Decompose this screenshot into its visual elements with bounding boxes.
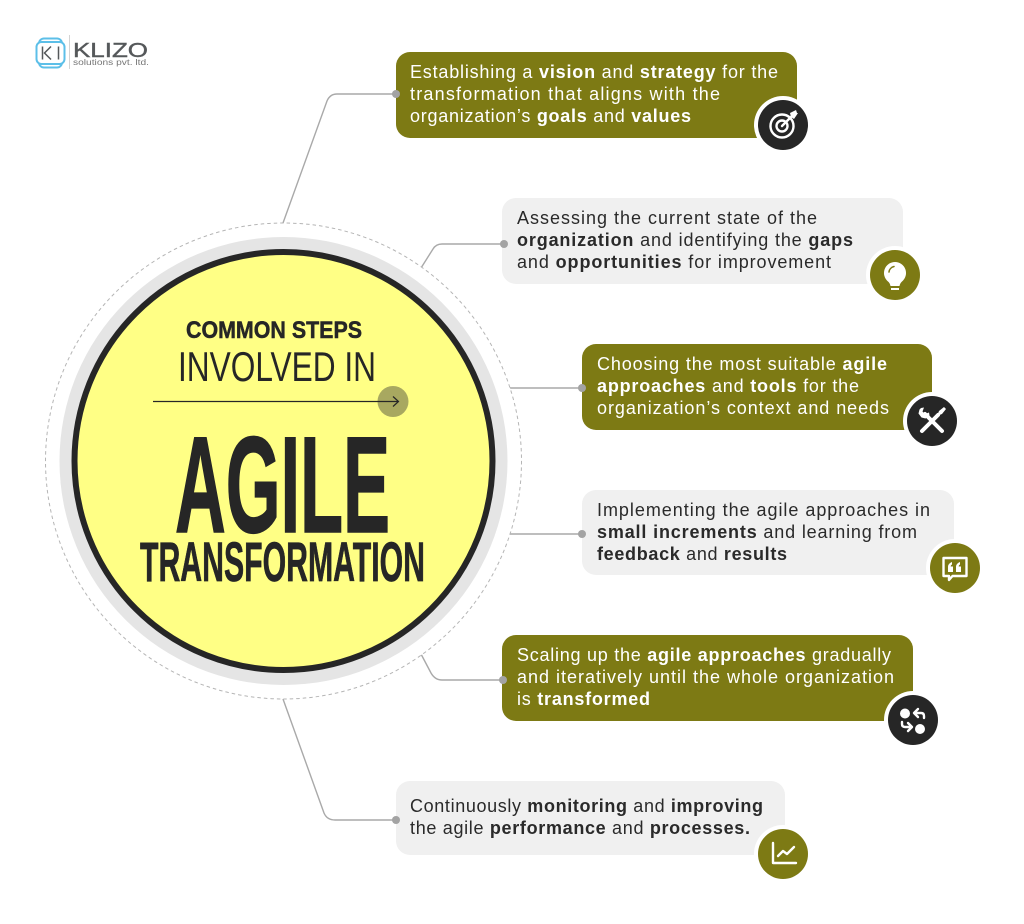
panel: scaling up [499,635,942,749]
text: step 2: and opportunities for improvement [517,252,831,272]
panel: implementing in increments [578,490,984,597]
text: step 6: Continuously monitoring and improving [410,796,763,816]
text: step 1: organization’s goals and values [410,106,691,126]
central circle [46,223,522,699]
text: step 1 [410,62,778,126]
text: step 4: feedback and results [597,544,787,564]
text: step 5 [517,645,894,709]
title: involved in: INVOLVED IN [178,343,376,390]
text: step 6: the agile performance and processes. [410,818,750,838]
text: step 2: Assessing the current state of the [517,208,817,228]
text: step 2 [517,208,853,272]
text: step 4: Implementing the agile approaches in [597,500,930,520]
icon: tools [903,392,961,450]
panel: choosing approaches [578,344,961,450]
text: step 4 [597,500,930,564]
text: step 5: and iteratively until the whole organization [517,667,894,687]
icon: feedback bubble [926,539,984,597]
text: step 1: transformation that aligns with the [410,84,720,104]
title: agile: AGILE [175,409,390,562]
text: step 5: is transformed [517,689,650,709]
connector lines [283,94,582,820]
text: step 2: organization and identifying the gaps [517,230,853,250]
icon: light bulb [866,246,924,304]
panel: current state assessment [500,198,924,304]
logo: Klizo [36,35,149,69]
logo: Klizo: KLIZO [73,40,148,62]
text: step 5: Scaling up the agile approaches gradually [517,645,891,665]
panel: vision and strategy [392,52,812,154]
title: common steps: COMMON STEPS [186,317,362,344]
text: step 3: approaches and tools for the [597,376,859,396]
panel: monitoring and improving [392,781,812,883]
text: step 1: Establishing a vision and strategy for the [410,62,778,82]
text: step 4: small increments and learning from [597,522,917,542]
text: step 3: organization’s context and needs [597,398,889,418]
text: step 6 [410,796,763,838]
text: step 3: Choosing the most suitable agile [597,354,887,374]
logo: Klizo: solutions pvt. ltd. [73,57,149,67]
icon: target [754,96,812,154]
title: transformation: TRANSFORMATION [140,530,425,593]
icon: swap [884,691,942,749]
arrow [153,386,408,417]
text: step 3 [597,354,889,418]
icon: line chart [754,825,812,883]
